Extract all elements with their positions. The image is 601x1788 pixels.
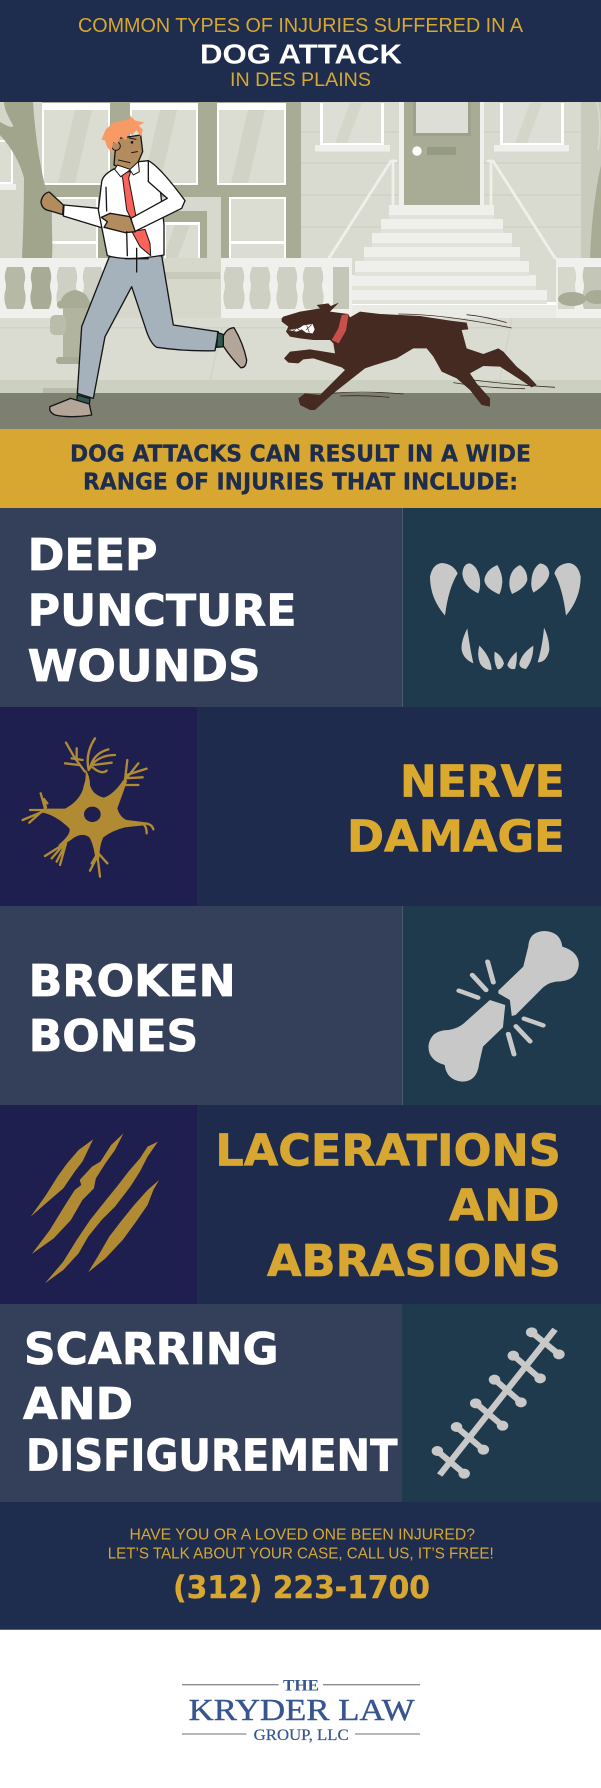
heading: scarring and disfigurement: AND — [23, 1379, 133, 1430]
panel: deep puncture wounds — [0, 508, 601, 707]
heading: deep puncture wounds — [28, 530, 297, 692]
neck and face — [114, 135, 143, 172]
gold intro banner — [0, 429, 601, 508]
shoes — [223, 328, 247, 368]
phone number: (312) 223-1700 — [173, 1570, 430, 1606]
icon: dog fangs — [430, 563, 581, 670]
fire hydrant — [50, 290, 91, 364]
shirt torso — [98, 161, 164, 259]
collar — [115, 162, 139, 177]
running dog — [282, 303, 555, 410]
dog teeth and snarl — [288, 324, 315, 333]
panel: broken bones — [0, 906, 601, 1105]
banner line 1: DOG ATTACKS CAN RESULT IN A WIDE — [70, 442, 531, 468]
front door — [399, 102, 484, 206]
call to action line 2: LET’S TALK ABOUT YOUR CASE, CALL US, IT’S FREE! — [108, 1545, 494, 1562]
dog body — [282, 303, 537, 410]
call to action line 1: HAVE YOU OR A LOVED ONE BEEN INJURED? — [130, 1526, 475, 1543]
heading: lacerations and abrasions: AND — [449, 1181, 560, 1232]
heading: nerve damage: NERVE — [400, 757, 565, 808]
shirt centre lines and face details — [106, 187, 148, 272]
hair — [102, 116, 144, 155]
logo: the kryder law group — [0, 1630, 601, 1788]
heading: nerve damage — [347, 757, 565, 863]
header line: in des plains: IN DES PLAINS — [230, 69, 371, 91]
heading: deep puncture wounds: DEEP — [28, 530, 158, 581]
panel: lacerations and abrasions — [0, 1105, 601, 1304]
necktie — [121, 171, 136, 220]
heading: scarring and disfigurement: DISFIGUREMENT — [26, 1431, 398, 1482]
icon: claw scratches — [31, 1133, 159, 1283]
sidewalk — [0, 318, 601, 429]
heading: broken bones: BROKEN — [29, 956, 236, 1007]
illustration: man chased by dog on street — [0, 102, 601, 429]
heading: broken bones: BONES — [29, 1011, 198, 1062]
tree trunk — [0, 102, 52, 258]
lower wall and balustrades — [0, 258, 601, 320]
ear — [112, 142, 120, 150]
stair railings — [329, 161, 555, 258]
trousers — [77, 256, 218, 398]
back arm and hand — [63, 205, 104, 228]
socks — [77, 333, 225, 404]
icon: nerve cell — [23, 738, 153, 877]
running man — [41, 116, 247, 417]
building facade right with siding — [301, 102, 601, 302]
logo: the kryder law group: GROUP, LLC — [254, 1727, 349, 1744]
heading: scarring and disfigurement: SCARRING — [24, 1324, 279, 1375]
logo: the kryder law group: KRYDER LAW — [189, 1692, 415, 1727]
header line: common types: COMMON TYPES OF INJURIES SUFFERED IN A — [78, 15, 524, 37]
dog collar — [332, 314, 349, 343]
header panel — [0, 0, 601, 102]
heading: deep puncture wounds: WOUNDS — [28, 641, 261, 692]
logo: the kryder law group: THE — [283, 1678, 319, 1695]
icon: broken bone — [428, 931, 579, 1082]
banner line 2: RANGE OF INJURIES THAT INCLUDE: — [83, 469, 518, 495]
panel: nerve damage — [0, 707, 601, 906]
speed lines — [330, 314, 555, 397]
raised sleeve — [131, 161, 185, 232]
heading: lacerations and abrasions — [215, 1126, 561, 1287]
heading: scarring and disfigurement — [23, 1324, 398, 1482]
icon: stitched scar — [432, 1327, 565, 1479]
heading: lacerations and abrasions: ABRASIONS — [267, 1236, 561, 1287]
header line: dog attack: DOG ATTACK — [200, 38, 402, 69]
heading: lacerations and abrasions: LACERATIONS — [215, 1126, 561, 1177]
heading: deep puncture wounds: PUNCTURE — [28, 586, 297, 637]
heading: broken bones — [29, 956, 236, 1062]
building facade left — [0, 102, 301, 282]
stairs — [336, 205, 562, 319]
panel: scarring and disfigurement — [0, 1304, 601, 1502]
heading: nerve damage: DAMAGE — [347, 812, 565, 863]
front hand — [101, 213, 135, 233]
footer call to action — [0, 1502, 601, 1630]
